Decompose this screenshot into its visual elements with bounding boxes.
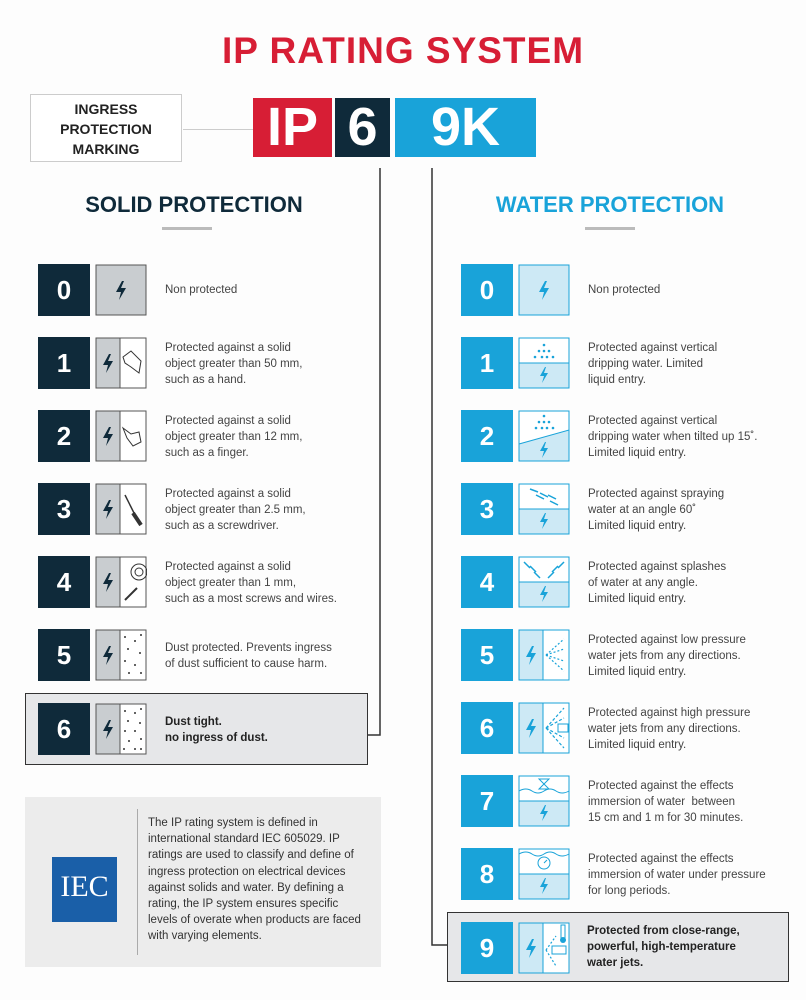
ingress protection marking box: PROTECTION bbox=[60, 121, 152, 137]
row 1 bbox=[461, 337, 717, 389]
IP69K logo: 9K bbox=[431, 97, 500, 157]
row 1: Protected against a solid bbox=[165, 342, 291, 354]
row 3 bbox=[461, 483, 724, 535]
row 0: 0 bbox=[57, 275, 71, 305]
row 2: Protected against a solid bbox=[165, 415, 291, 427]
row 6: Protected against high pressure bbox=[588, 707, 750, 719]
row 6: Limited liquid entry. bbox=[588, 739, 686, 751]
row 4: of water at any angle. bbox=[588, 577, 698, 589]
row 1: dripping water. Limited bbox=[588, 358, 703, 370]
panel: IEC info bbox=[25, 797, 381, 967]
row 5: Protected against low pressure bbox=[588, 634, 746, 646]
panel: water rows bbox=[447, 264, 789, 982]
row 7: 7 bbox=[480, 786, 494, 816]
row 8 bbox=[461, 848, 766, 900]
row 5: 5 bbox=[57, 640, 71, 670]
row 4: 4 bbox=[480, 567, 494, 597]
row 4: Limited liquid entry. bbox=[588, 593, 686, 605]
icon: IEC logo: IEC bbox=[60, 870, 109, 903]
row 2 bbox=[461, 410, 757, 462]
row 1: object greater than 50 mm, bbox=[165, 358, 302, 370]
row 6 highlighted: Dust tight. bbox=[165, 716, 222, 728]
row 0: 0 bbox=[480, 275, 494, 305]
row 2 bbox=[38, 410, 302, 462]
ingress protection marking box bbox=[30, 94, 182, 162]
row 3: object greater than 2.5 mm, bbox=[165, 504, 306, 516]
row 3: such as a screwdriver. bbox=[165, 520, 279, 532]
text block: The IP rating system is defined in international standard IEC 605029. IP ratings are used to classify and define of ingress protection on electrical devices against solids and water. By defining a rating, the IP system ensures specific levels of overate when products are faced with varying elements. bbox=[148, 817, 361, 942]
row 4: Protected against a solid bbox=[165, 561, 291, 573]
ingress protection marking box: INGRESS bbox=[74, 101, 138, 117]
title: IP RATING SYSTEM bbox=[222, 30, 584, 71]
ingress protection marking box: MARKING bbox=[73, 141, 139, 157]
row 1: Protected against vertical bbox=[588, 342, 717, 354]
row 2: object greater than 12 mm, bbox=[165, 431, 302, 443]
row 6 highlighted: 6 bbox=[57, 714, 71, 744]
row 0 bbox=[461, 264, 660, 316]
row 6: 6 bbox=[480, 713, 494, 743]
row 2: such as a finger. bbox=[165, 447, 249, 459]
row 2: 2 bbox=[480, 421, 494, 451]
row 8: Protected against the effects bbox=[588, 853, 734, 865]
heading: solid protection: SOLID PROTECTION bbox=[85, 192, 303, 217]
row 3: 3 bbox=[57, 494, 71, 524]
row 7: 15 cm and 1 m for 30 minutes. bbox=[588, 812, 743, 824]
row 8: immersion of water under pressure bbox=[588, 869, 766, 881]
row 7: Protected against the effects bbox=[588, 780, 734, 792]
row 0: Non protected bbox=[588, 284, 660, 296]
row 5: Limited liquid entry. bbox=[588, 666, 686, 678]
row 1: such as a hand. bbox=[165, 374, 246, 386]
row 5: 5 bbox=[480, 640, 494, 670]
row 4: 4 bbox=[57, 567, 71, 597]
row 7: immersion of water between bbox=[588, 796, 735, 808]
row 1: 1 bbox=[480, 348, 494, 378]
row 6 bbox=[461, 702, 750, 754]
row 2: Protected against vertical bbox=[588, 415, 717, 427]
row 2: dripping water when tilted up 15˚. bbox=[588, 431, 757, 443]
row 4: such as a most screws and wires. bbox=[165, 593, 337, 605]
row 3 bbox=[38, 483, 306, 535]
row 1: liquid entry. bbox=[588, 374, 646, 386]
row 7 bbox=[461, 775, 743, 827]
row 8: for long periods. bbox=[588, 885, 670, 897]
row 4 bbox=[38, 556, 337, 608]
row 1: 1 bbox=[57, 348, 71, 378]
row 6: water jets from any directions. bbox=[588, 723, 741, 735]
row 4 bbox=[461, 556, 726, 608]
row 3: Protected against spraying bbox=[588, 488, 724, 500]
row 5 bbox=[38, 629, 332, 681]
row 4: Protected against splashes bbox=[588, 561, 726, 573]
row 5: of dust sufficient to cause harm. bbox=[165, 658, 327, 670]
row 3: water at an angle 60˚ bbox=[588, 504, 696, 516]
IP69K logo: IP bbox=[267, 97, 318, 157]
IP69K logo bbox=[253, 97, 536, 157]
row 3: 3 bbox=[480, 494, 494, 524]
row 1 bbox=[38, 337, 302, 389]
row 4: object greater than 1 mm, bbox=[165, 577, 296, 589]
panel: solid rows bbox=[25, 264, 368, 765]
row 0 bbox=[38, 264, 237, 316]
row 0: Non protected bbox=[165, 284, 237, 296]
row 3: Protected against a solid bbox=[165, 488, 291, 500]
row 9 highlighted: powerful, high-temperature bbox=[587, 941, 736, 953]
row 6 highlighted bbox=[25, 693, 368, 765]
row 9 highlighted: water jets. bbox=[587, 957, 643, 969]
row 3: Limited liquid entry. bbox=[588, 520, 686, 532]
row 8: 8 bbox=[480, 859, 494, 889]
IP69K logo: 6 bbox=[347, 97, 378, 157]
row 9 highlighted bbox=[447, 912, 789, 982]
row 5: Dust protected. Prevents ingress bbox=[165, 642, 332, 654]
icon: IEC logo bbox=[52, 857, 117, 922]
row 2: 2 bbox=[57, 421, 71, 451]
row 9 highlighted: 9 bbox=[480, 933, 494, 963]
heading: water protection: WATER PROTECTION bbox=[496, 192, 724, 217]
row 2: Limited liquid entry. bbox=[588, 447, 686, 459]
row 9 highlighted: Protected from close-range, bbox=[587, 925, 740, 937]
row 5 bbox=[461, 629, 746, 681]
row 6 highlighted: no ingress of dust. bbox=[165, 732, 268, 744]
row 5: water jets from any directions. bbox=[588, 650, 741, 662]
